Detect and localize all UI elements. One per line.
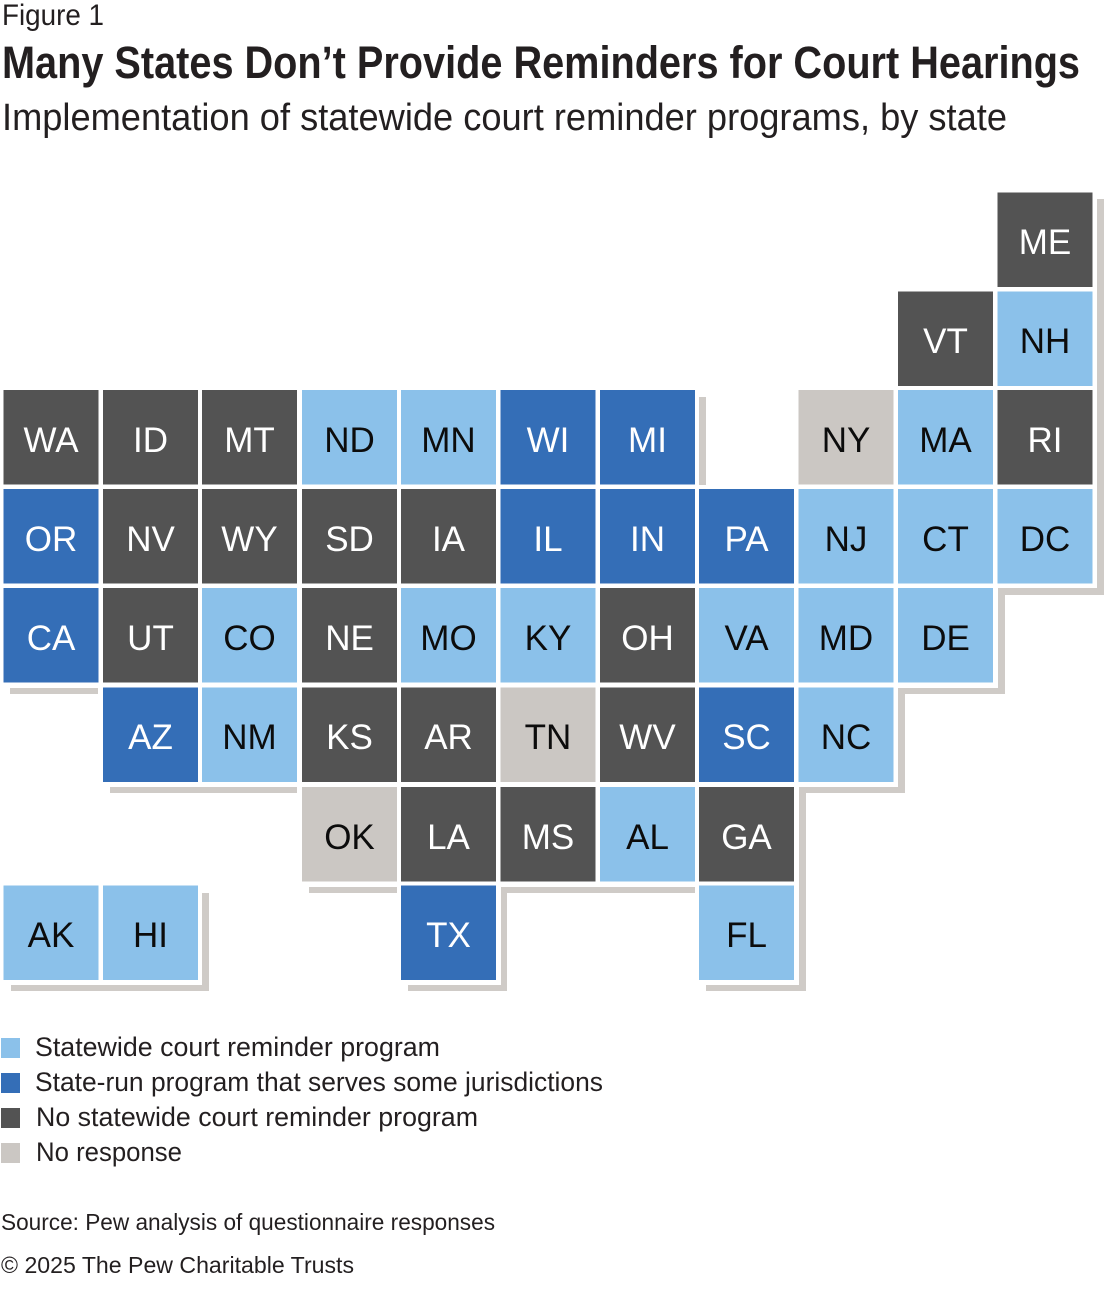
state: DE (898, 588, 993, 682)
state: HI (103, 886, 198, 980)
state: NC: NC (821, 718, 871, 757)
state: UT (103, 588, 198, 682)
state: WA (4, 390, 98, 484)
state: CO (202, 588, 297, 682)
state: CA: CA (27, 619, 76, 658)
state: NV: NV (126, 520, 175, 559)
state: MO: MO (420, 619, 477, 658)
state: FL: FL (726, 916, 767, 955)
state: OK: OK (324, 818, 375, 857)
state: LA (401, 787, 496, 882)
copyright: © 2025 The Pew Charitable Trusts (1, 1252, 354, 1278)
state: SD: SD (325, 520, 374, 559)
state: TN: TN (525, 718, 571, 757)
state: GA: GA (721, 818, 772, 857)
state: MO (401, 588, 496, 682)
state: DC: DC (1020, 520, 1070, 559)
state: MI (600, 390, 695, 484)
state: WI (500, 390, 596, 484)
state: WY: WY (221, 520, 278, 559)
state: WA: WA (23, 421, 79, 460)
state: AK (4, 886, 98, 980)
state: OK (302, 787, 397, 882)
state: MD: MD (819, 619, 873, 658)
state: ME: ME (1019, 223, 1071, 262)
state: KY: KY (525, 619, 571, 658)
state: IN: IN (630, 520, 665, 559)
state: WV (600, 688, 695, 782)
state: SC: SC (722, 718, 771, 757)
tile grid map (4, 192, 1104, 991)
state: OR: OR (25, 520, 77, 559)
state: MN: MN (421, 421, 476, 460)
state: MA: MA (919, 421, 972, 460)
state: IN (600, 489, 695, 584)
state: SC (699, 688, 794, 782)
state: AK: AK (28, 916, 74, 955)
subtitle: Implementation of statewide court reminder programs, by state (2, 97, 1007, 139)
state: ID (103, 390, 198, 484)
state: NH: NH (1020, 322, 1070, 361)
state: WI: WI (527, 421, 569, 460)
state: IL (500, 489, 596, 584)
legend item: no response: No response (36, 1137, 182, 1167)
state: OH (600, 588, 695, 682)
state: NE: NE (325, 619, 374, 658)
state: KS (302, 688, 397, 782)
state: IA (401, 489, 496, 584)
state: DC (998, 489, 1092, 584)
state: ID: ID (133, 421, 168, 460)
state: ND: ND (324, 421, 375, 460)
state: MT: MT (224, 421, 275, 460)
state: VT: VT (923, 322, 968, 361)
state: SD (302, 489, 397, 584)
state: NJ (798, 489, 894, 584)
legend item: no statewide program: No statewide court reminder program (36, 1102, 478, 1132)
state: VA (699, 588, 794, 682)
state: MD (798, 588, 894, 682)
state: AR (401, 688, 496, 782)
state: UT: UT (127, 619, 174, 658)
state: AR: AR (424, 718, 473, 757)
state: NY: NY (822, 421, 870, 460)
state: WV: WV (619, 718, 676, 757)
state: WY (202, 489, 297, 584)
state: TX (401, 886, 496, 980)
state: RI: RI (1028, 421, 1062, 460)
state: MS (500, 787, 596, 882)
state: ND (302, 390, 397, 484)
state: CT (898, 489, 993, 584)
state: OR (4, 489, 98, 584)
state: CO: CO (223, 619, 276, 658)
state: NJ: NJ (825, 520, 867, 559)
state: DE: DE (921, 619, 970, 658)
state: KS: KS (326, 718, 373, 757)
state: MT (202, 390, 297, 484)
state: AZ (103, 688, 198, 782)
state: MI: MI (628, 421, 667, 460)
state: OH: OH (621, 619, 674, 658)
state: MN (401, 390, 496, 484)
state: LA: LA (427, 818, 471, 857)
state: MA (898, 390, 993, 484)
state: CT: CT (922, 520, 969, 559)
legend item: statewide program: Statewide court reminder program (35, 1032, 440, 1062)
legend (1, 1032, 603, 1167)
state: NY (798, 390, 894, 484)
state: TX: TX (426, 916, 471, 955)
state: CA (4, 588, 98, 682)
state: HI: HI (133, 916, 168, 955)
state: IL: IL (533, 520, 563, 559)
state: MS: MS (522, 818, 574, 857)
state: GA (699, 787, 794, 882)
state: FL (699, 886, 794, 980)
state: PA (699, 489, 794, 584)
state: AZ: AZ (128, 718, 173, 757)
state: RI (998, 390, 1092, 484)
state: KY (500, 588, 596, 682)
state: IA: IA (432, 520, 466, 559)
state: PA: PA (724, 520, 769, 559)
state: VA: VA (724, 619, 769, 658)
state: AL: AL (626, 818, 669, 857)
source note: Source: Pew analysis of questionnaire responses (1, 1209, 495, 1235)
state: ME (998, 192, 1092, 287)
state: NV (103, 489, 198, 584)
legend item: state-run program: State-run program that serves some jurisdictions (35, 1067, 603, 1097)
state: NH (998, 292, 1092, 386)
state: NM (202, 688, 297, 782)
state: TN (500, 688, 596, 782)
state: NM: NM (222, 718, 277, 757)
state: NC (798, 688, 894, 782)
state: NE (302, 588, 397, 682)
state: AL (600, 787, 695, 882)
state: VT (898, 292, 993, 386)
